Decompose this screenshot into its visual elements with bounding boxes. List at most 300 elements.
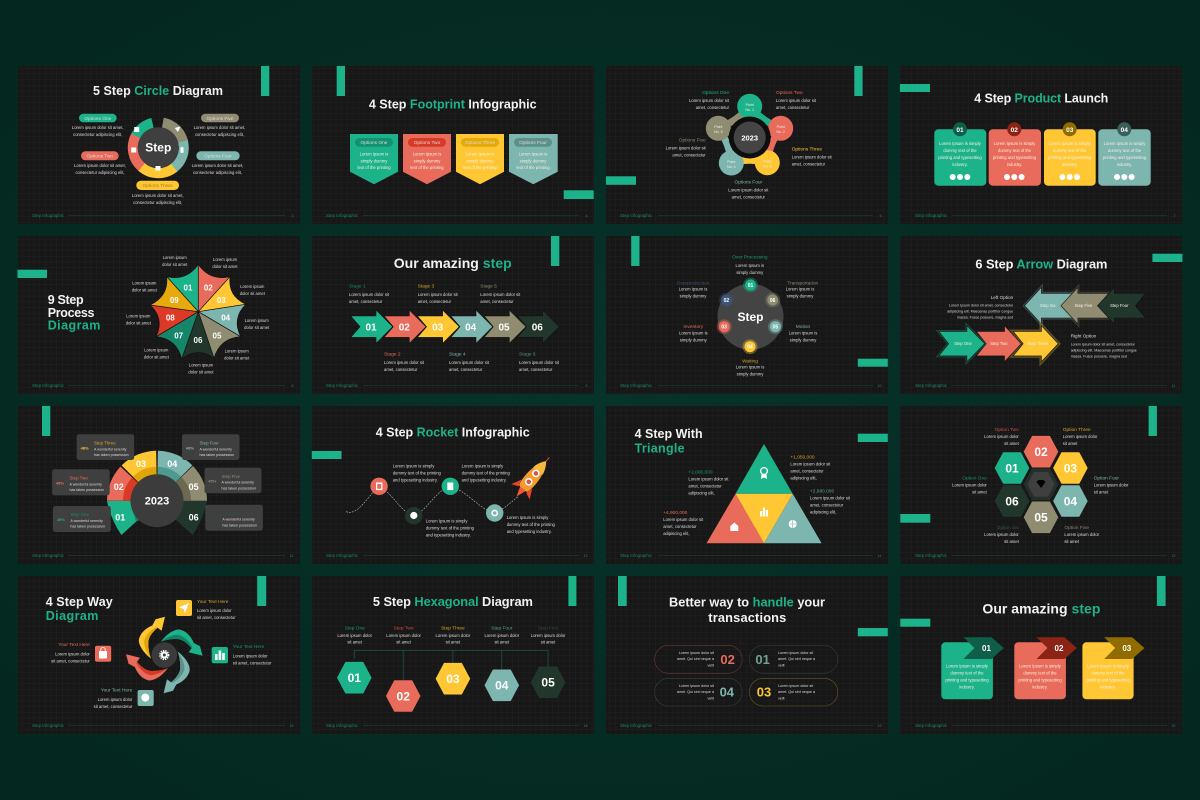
left option text: adipiscing elit. Maecenas porttitor congue bbox=[947, 309, 1013, 313]
product cards: Lorem Ipsum is simply bbox=[1104, 141, 1146, 146]
way labels bbox=[51, 599, 272, 709]
footprint tags: Options One bbox=[361, 140, 388, 146]
footer: 18 bbox=[584, 724, 588, 728]
way labels: sit amet, consectetur bbox=[197, 615, 236, 620]
right pointing arrows bbox=[939, 326, 1058, 362]
stage labels: Lorem Ipsum is bbox=[679, 286, 707, 291]
slide background bbox=[18, 66, 300, 224]
swirl arrows bbox=[126, 617, 203, 693]
semicircle chart bbox=[103, 447, 211, 554]
slide background bbox=[606, 576, 888, 734]
accent bar bbox=[337, 66, 345, 96]
hexagon labels: Option One bbox=[962, 476, 987, 482]
footer: 19 bbox=[878, 724, 882, 728]
hexagon labels: Option Six bbox=[997, 525, 1019, 531]
product cards: 01 bbox=[956, 127, 964, 134]
title: 6 Step Arrow Diagram bbox=[975, 257, 1107, 272]
arrow chain: 05 bbox=[498, 322, 510, 333]
wedge labels: Lorem ipsum bbox=[126, 314, 151, 319]
arrow chain: 04 bbox=[465, 322, 477, 333]
wedge labels: Lorem ipsum bbox=[240, 284, 265, 289]
product cards: printing and typesetting bbox=[1048, 155, 1092, 160]
hexagon labels: sit amet bbox=[1004, 441, 1020, 446]
step cards: Step One bbox=[70, 512, 90, 517]
wedge labels: Lorem ipsum bbox=[163, 255, 187, 260]
option labels: Options Two bbox=[776, 90, 803, 96]
triangle labels: amet, consectetur bbox=[688, 484, 722, 489]
way labels: Your Text Here bbox=[233, 644, 265, 650]
step cards: dummy text of the bbox=[1091, 671, 1125, 676]
footer: Step Infographic bbox=[915, 213, 948, 218]
product cards: dummy text of the bbox=[998, 148, 1032, 153]
wedge labels: dolor sit amet bbox=[132, 288, 158, 293]
footer bbox=[32, 213, 294, 218]
accent bar secondary bbox=[900, 619, 930, 627]
triangle labels: +4,900,000 bbox=[663, 510, 688, 516]
loop diagram: No. 1 bbox=[745, 108, 754, 112]
product cards bbox=[934, 122, 1151, 186]
arrow chain: 06 bbox=[532, 322, 543, 333]
text blocks: dummy text of the printing bbox=[426, 526, 475, 531]
accent bar bbox=[261, 66, 269, 96]
footer: 16 bbox=[290, 724, 294, 728]
transaction pills: amet. Qui sint neque a bbox=[677, 657, 715, 661]
step cards: 02 bbox=[1055, 644, 1064, 653]
left pointing arrows: Step Five bbox=[1075, 303, 1093, 308]
star wedge diagram: 01 bbox=[184, 283, 193, 292]
loop diagram: Point bbox=[727, 160, 735, 164]
step labels: Step Three bbox=[441, 625, 465, 631]
accent bar bbox=[900, 84, 930, 92]
transaction pills: 03 bbox=[757, 684, 771, 700]
title: Diagram bbox=[46, 609, 98, 623]
connector lines bbox=[354, 650, 548, 680]
step cards: 45% bbox=[208, 479, 217, 484]
footer bbox=[326, 553, 588, 558]
option labels: Lorem ipsum dolor sit amet, bbox=[74, 163, 126, 168]
loop diagram bbox=[706, 94, 793, 176]
product cards: printing and typesetting bbox=[938, 155, 982, 160]
hexagon diagram: 04 bbox=[1064, 494, 1077, 508]
step cards: Lorem Ipsum is simply bbox=[946, 664, 989, 669]
stage labels: Stage 3 bbox=[418, 284, 435, 290]
semicircle chart: 03 bbox=[136, 459, 146, 469]
right option text: massa. Fusce posuere, magna sed bbox=[1071, 354, 1127, 358]
step cards: 01 bbox=[982, 644, 991, 653]
text blocks: and typesetting industry. bbox=[426, 533, 471, 538]
footer: Step Infographic bbox=[915, 383, 948, 388]
star wedge diagram: 08 bbox=[166, 313, 175, 322]
footer: 5 bbox=[880, 214, 882, 218]
option labels: Lorem ipsum dolor sit bbox=[689, 98, 730, 103]
stage labels: amet, consectetur bbox=[449, 367, 483, 372]
footprint tags: Lorem Ipsum is bbox=[519, 152, 547, 156]
footer: 12 bbox=[290, 554, 294, 558]
step cards: Step Six bbox=[222, 511, 240, 516]
slide background bbox=[900, 406, 1182, 564]
panel: 9 step process diagram bbox=[18, 236, 300, 394]
hexagons: 03 bbox=[446, 672, 460, 686]
stage labels bbox=[349, 284, 560, 372]
step cards: Step Three bbox=[94, 440, 116, 446]
step circle: 06 bbox=[770, 298, 776, 304]
step cards: printing and typesetting bbox=[1018, 678, 1062, 683]
star wedge diagram: 03 bbox=[217, 296, 226, 305]
option labels: Lorem ipsum dolor sit amet, bbox=[192, 163, 243, 168]
option labels bbox=[72, 114, 245, 205]
transaction pills: velit bbox=[707, 696, 714, 700]
slide background bbox=[900, 236, 1182, 394]
stage labels: Lorem Ipsum is bbox=[786, 286, 814, 291]
wedge labels: Lorem ipsum bbox=[225, 349, 249, 354]
footer bbox=[32, 723, 294, 728]
stage labels: Transportation bbox=[787, 280, 819, 286]
footer: Step Infographic bbox=[620, 213, 653, 218]
footprint tags: text of the printing bbox=[410, 165, 444, 170]
footer: 4 bbox=[586, 214, 588, 218]
footer: 13 bbox=[584, 554, 588, 558]
footer: Step Infographic bbox=[32, 553, 65, 558]
hexagon labels: sit amet bbox=[972, 490, 988, 495]
step cards: has taken possession bbox=[94, 453, 129, 457]
arrow chain: 02 bbox=[399, 322, 410, 333]
stage labels: Lorem ipsum dolor sit bbox=[480, 292, 521, 297]
wedge labels: dolor sit amet bbox=[244, 325, 270, 330]
transaction pills: 02 bbox=[720, 652, 735, 667]
left option text: Left Option bbox=[991, 295, 1014, 300]
option labels: amet, consectetur bbox=[696, 105, 730, 110]
option labels: consectetur adipiscing elit, bbox=[73, 132, 122, 137]
circle diagram: Step bbox=[145, 141, 171, 155]
footer bbox=[326, 383, 588, 388]
slide background bbox=[606, 236, 888, 394]
step labels: Lorem ipsum dolor bbox=[531, 633, 566, 638]
step cards: Step Four bbox=[200, 440, 219, 446]
panel: 5 step hexagonal diagram bbox=[312, 576, 594, 734]
semicircle chart: 06 bbox=[189, 512, 199, 522]
title: 4 Step Footprint Infographic bbox=[369, 98, 537, 112]
triangle labels: Lorem ipsum dolor sit bbox=[663, 517, 704, 522]
step labels: sit amet bbox=[396, 639, 412, 644]
right option text bbox=[1071, 334, 1137, 358]
triangle labels: +2,880,000 bbox=[810, 489, 834, 495]
text blocks: and typesetting industry. bbox=[507, 529, 552, 534]
footprint tags: Options Two bbox=[414, 140, 441, 146]
accent bar secondary bbox=[606, 176, 636, 185]
hexagon labels: sit amet bbox=[1004, 539, 1020, 544]
footer: 9 bbox=[586, 384, 588, 388]
step labels: Lorem ipsum dolor bbox=[484, 633, 520, 638]
wedge labels: dolor sit amet bbox=[240, 291, 266, 296]
footprint tags bbox=[350, 134, 558, 184]
text blocks: dummy text of the printing bbox=[462, 471, 510, 476]
option labels: Options Four bbox=[734, 180, 763, 186]
product cards: industry. bbox=[1007, 162, 1022, 167]
hexagon labels: Lorem ipsum dolor bbox=[984, 434, 1019, 439]
loop diagram: No. 4 bbox=[727, 165, 736, 169]
stage labels: Stage 1 bbox=[349, 284, 366, 290]
option labels: Options Three bbox=[142, 183, 173, 189]
option labels: Lorem ipsum dolor sit bbox=[728, 188, 769, 193]
option labels: consectetur adipiscing elit, bbox=[193, 170, 242, 175]
step cards: has taken possession bbox=[70, 488, 104, 492]
way labels: Lorem ipsum dolor bbox=[98, 697, 133, 702]
hexagon labels: Option Four bbox=[1094, 476, 1119, 482]
transaction pills: Lorem ipsum dolor sit bbox=[778, 684, 813, 688]
panel: our amazing step arrows bbox=[312, 236, 594, 394]
accent bar bbox=[858, 434, 888, 442]
step cards: printing and typesetting bbox=[945, 678, 989, 683]
footer bbox=[915, 383, 1175, 388]
footer bbox=[620, 213, 882, 218]
stage labels: simply dummy bbox=[736, 270, 764, 275]
hexagon diagram: 02 bbox=[1034, 445, 1048, 459]
step labels: Step Two bbox=[394, 625, 414, 631]
footer: 3 bbox=[292, 214, 294, 218]
hexagon labels: sit amet bbox=[1094, 490, 1109, 495]
stage labels: simply dummy bbox=[737, 372, 764, 376]
panel: 4 step with triangle bbox=[606, 406, 888, 564]
loop diagram: Point bbox=[746, 103, 754, 107]
star wedge diagram: 06 bbox=[194, 336, 203, 345]
way labels: Your Text Here bbox=[197, 599, 229, 605]
step cards bbox=[52, 434, 263, 532]
footer: 15 bbox=[1172, 554, 1176, 558]
footer: Step Infographic bbox=[326, 553, 359, 558]
accent bar bbox=[18, 270, 47, 278]
step cards: 45% bbox=[209, 516, 218, 521]
accent bar bbox=[1149, 406, 1157, 436]
footer: 7 bbox=[1174, 214, 1176, 218]
stage labels: amet, consectetur bbox=[519, 367, 553, 372]
transaction pills: amet. Qui sint neque a bbox=[778, 657, 816, 661]
step labels: sit amet bbox=[446, 639, 461, 644]
semicircle chart: 01 bbox=[115, 512, 125, 522]
accent bar bbox=[568, 576, 576, 606]
transaction pills bbox=[655, 645, 838, 706]
transaction pills: velit bbox=[778, 696, 785, 700]
step circle: 03 bbox=[721, 324, 727, 330]
title: 4 Step With bbox=[635, 427, 703, 441]
triangle labels: +1,050,000 bbox=[790, 454, 815, 460]
text blocks: Lorem Ipsum is simply bbox=[426, 519, 468, 524]
wedge labels bbox=[126, 255, 270, 374]
triangle labels: amet, consectetur bbox=[663, 524, 697, 529]
step cards: has taken possession bbox=[222, 486, 256, 490]
option labels: Options Five bbox=[679, 138, 706, 144]
footer: Step Infographic bbox=[32, 213, 65, 218]
title: transactions bbox=[708, 610, 786, 625]
hexagon labels: Option Two bbox=[995, 427, 1019, 433]
footer: 11 bbox=[1172, 384, 1175, 388]
step cards: A wonderful serenity bbox=[222, 481, 254, 485]
wedge labels: dolor sit amet bbox=[162, 262, 188, 267]
accent bar bbox=[551, 236, 559, 266]
hexagons bbox=[337, 662, 565, 712]
hexagon labels: Option Three bbox=[1063, 427, 1091, 433]
step cards: has taken possession bbox=[222, 523, 257, 527]
triangle labels: +2,000,000 bbox=[688, 470, 713, 476]
product cards: dummy text of the bbox=[1108, 148, 1142, 153]
title: Better way to handle your bbox=[669, 595, 825, 610]
stage labels: Lorem ipsum dolor sit bbox=[519, 360, 560, 365]
footer: Step Infographic bbox=[915, 723, 948, 728]
stage labels: Lorem Ipsum is bbox=[789, 330, 817, 335]
panel: 4 step way diagram bbox=[18, 576, 300, 734]
step cards: industry. bbox=[1032, 685, 1048, 690]
arrow chain: 03 bbox=[432, 322, 444, 333]
step circle: 04 bbox=[747, 344, 753, 350]
panel: 4 step rocket infographic bbox=[312, 406, 594, 564]
product cards: 02 bbox=[1011, 127, 1018, 134]
footer: Step Infographic bbox=[326, 213, 359, 218]
footer: Step Infographic bbox=[32, 383, 65, 388]
triangle labels: amet, consectetur bbox=[790, 469, 824, 474]
option labels: consectetur adipiscing elit, bbox=[195, 132, 244, 137]
triangle labels: adipiscing elit, bbox=[810, 510, 836, 515]
option labels: amet, consectetur bbox=[776, 105, 810, 110]
option labels: Options One bbox=[702, 90, 729, 96]
hexagon labels: Option Five bbox=[1064, 525, 1089, 531]
footprint tags: text of the printing bbox=[357, 165, 391, 170]
left option text bbox=[947, 295, 1014, 319]
step cards: A wonderful serenity bbox=[70, 482, 102, 486]
title bbox=[635, 427, 703, 455]
panel: hexagon cluster bbox=[900, 406, 1182, 564]
footer: Step Infographic bbox=[326, 383, 359, 388]
slide background bbox=[606, 406, 888, 564]
transaction pills: amet. Qui sint neque a bbox=[677, 690, 715, 694]
panel: six stage step circle bbox=[606, 236, 888, 394]
text blocks: and typesetting industry. bbox=[393, 478, 438, 483]
stage labels: Lorem Ipsum is bbox=[679, 330, 708, 335]
left option text: massa. Fusce posuere, magna sed bbox=[957, 315, 1013, 319]
slide background bbox=[900, 576, 1182, 734]
triangle labels: Lorem ipsum dolor sit bbox=[810, 496, 851, 501]
stage labels: Stage 2 bbox=[384, 352, 401, 358]
stage labels: amet, consectetur bbox=[480, 299, 514, 304]
step cards: A wonderful serenity bbox=[222, 518, 255, 522]
transaction pills: Lorem ipsum dolor sit bbox=[778, 651, 813, 655]
way labels: sit amet, consectetur bbox=[51, 658, 90, 663]
slide background bbox=[312, 406, 594, 564]
accent bar bbox=[1152, 254, 1182, 262]
footer bbox=[32, 383, 294, 388]
panel: 6 step arrow diagram bbox=[900, 236, 1182, 394]
title bbox=[48, 293, 100, 332]
circle diagram bbox=[122, 112, 194, 184]
footer: Step Infographic bbox=[915, 553, 948, 558]
arrow chain: 01 bbox=[365, 322, 377, 333]
accent bar secondary bbox=[858, 359, 888, 367]
footprint tags: Options Four bbox=[519, 140, 547, 146]
step labels: Lorem ipsum dolor bbox=[337, 633, 373, 638]
hexagon labels: Lorem ipsum dolor bbox=[1063, 434, 1098, 439]
stage labels: Lorem ipsum dolor sit bbox=[349, 292, 390, 297]
step circle bbox=[717, 278, 784, 354]
option labels: Lorem ipsum dolor sit amet, bbox=[194, 125, 245, 130]
way labels: sit amet, consectetur bbox=[94, 704, 133, 709]
step cards: 48% bbox=[81, 445, 89, 450]
star wedge diagram: 04 bbox=[221, 313, 231, 322]
step cards: 45% bbox=[57, 517, 65, 522]
slide background bbox=[18, 236, 300, 394]
step cards: Step Two bbox=[70, 476, 88, 480]
transaction pills: Lorem ipsum dolor sit bbox=[679, 684, 714, 688]
option labels: amet, consectetur bbox=[672, 153, 706, 158]
triangle labels: adipiscing elit, bbox=[790, 476, 817, 481]
milestone circles bbox=[370, 478, 503, 524]
hexagon diagram: 01 bbox=[1005, 461, 1019, 475]
triangle labels bbox=[663, 454, 851, 536]
right pointing arrows: Step One bbox=[954, 341, 973, 346]
step labels: Lorem ipsum dolor bbox=[386, 633, 422, 638]
option labels: Options Four bbox=[204, 154, 232, 160]
accent bar bbox=[618, 576, 627, 606]
loop diagram: No. 2 bbox=[776, 130, 785, 134]
left pointing arrows: Step Four bbox=[1110, 303, 1129, 308]
step cards: Lorem Ipsum is simply bbox=[1087, 664, 1130, 669]
title: 4 Step Rocket Infographic bbox=[376, 425, 530, 439]
transaction pills: 01 bbox=[755, 652, 770, 667]
option labels: Lorem ipsum dolor sit amet, bbox=[132, 193, 184, 198]
step labels: Step One bbox=[345, 625, 365, 631]
triangle diagram bbox=[706, 444, 822, 543]
option labels: Options Three bbox=[792, 147, 822, 153]
hexagon diagram: 03 bbox=[1064, 461, 1077, 475]
accent bar bbox=[1157, 576, 1166, 606]
step cards: dummy text of the bbox=[1023, 671, 1057, 676]
hexagon diagram: 06 bbox=[1005, 494, 1019, 508]
footer bbox=[326, 723, 588, 728]
footprint tags: simply dummy bbox=[520, 158, 547, 163]
left pointing arrows: Step Six bbox=[1040, 303, 1056, 308]
triangle labels: Lorem ipsum dolor sit bbox=[790, 462, 831, 467]
step circle: 01 bbox=[748, 283, 753, 289]
semicircle chart: 05 bbox=[189, 482, 199, 492]
stage labels: Over Processing bbox=[732, 255, 768, 261]
footprint tags: text of the printing bbox=[516, 165, 550, 170]
panel: better way to handle your transactions bbox=[606, 576, 888, 734]
stage labels: amet, consectetur bbox=[384, 367, 418, 372]
option labels: amet, consectetur bbox=[732, 195, 766, 200]
triangle labels: adipiscing elit, bbox=[688, 491, 715, 496]
option labels: Lorem ipsum dolor sit bbox=[666, 146, 707, 151]
product cards: industry. bbox=[1117, 162, 1132, 167]
slide background bbox=[900, 66, 1182, 224]
product cards: 04 bbox=[1121, 127, 1128, 134]
footer: Step Infographic bbox=[620, 383, 653, 388]
stage labels: Stage 6 bbox=[519, 352, 536, 358]
way labels: Lorem ipsum dolor bbox=[197, 608, 232, 613]
stage labels: Inventory bbox=[683, 324, 704, 330]
semicircle chart: 04 bbox=[167, 459, 177, 469]
product cards: 03 bbox=[1066, 127, 1074, 134]
panel: 4 step footprint infographic bbox=[312, 66, 594, 224]
slide background bbox=[312, 576, 594, 734]
footer bbox=[32, 553, 294, 558]
way labels: Lorem ipsum dolor bbox=[233, 653, 268, 658]
dashed flight path bbox=[346, 486, 518, 516]
product cards: industry. bbox=[952, 162, 968, 167]
hexagon labels bbox=[952, 427, 1129, 544]
step cards: A wonderful serenity bbox=[70, 519, 103, 523]
title: Our amazing step bbox=[394, 255, 512, 271]
step cards: 03 bbox=[1122, 644, 1132, 653]
footprint tags: simply dummy bbox=[467, 158, 494, 163]
product cards: industry. bbox=[1062, 162, 1078, 167]
loop diagram: No. 3 bbox=[763, 164, 772, 168]
